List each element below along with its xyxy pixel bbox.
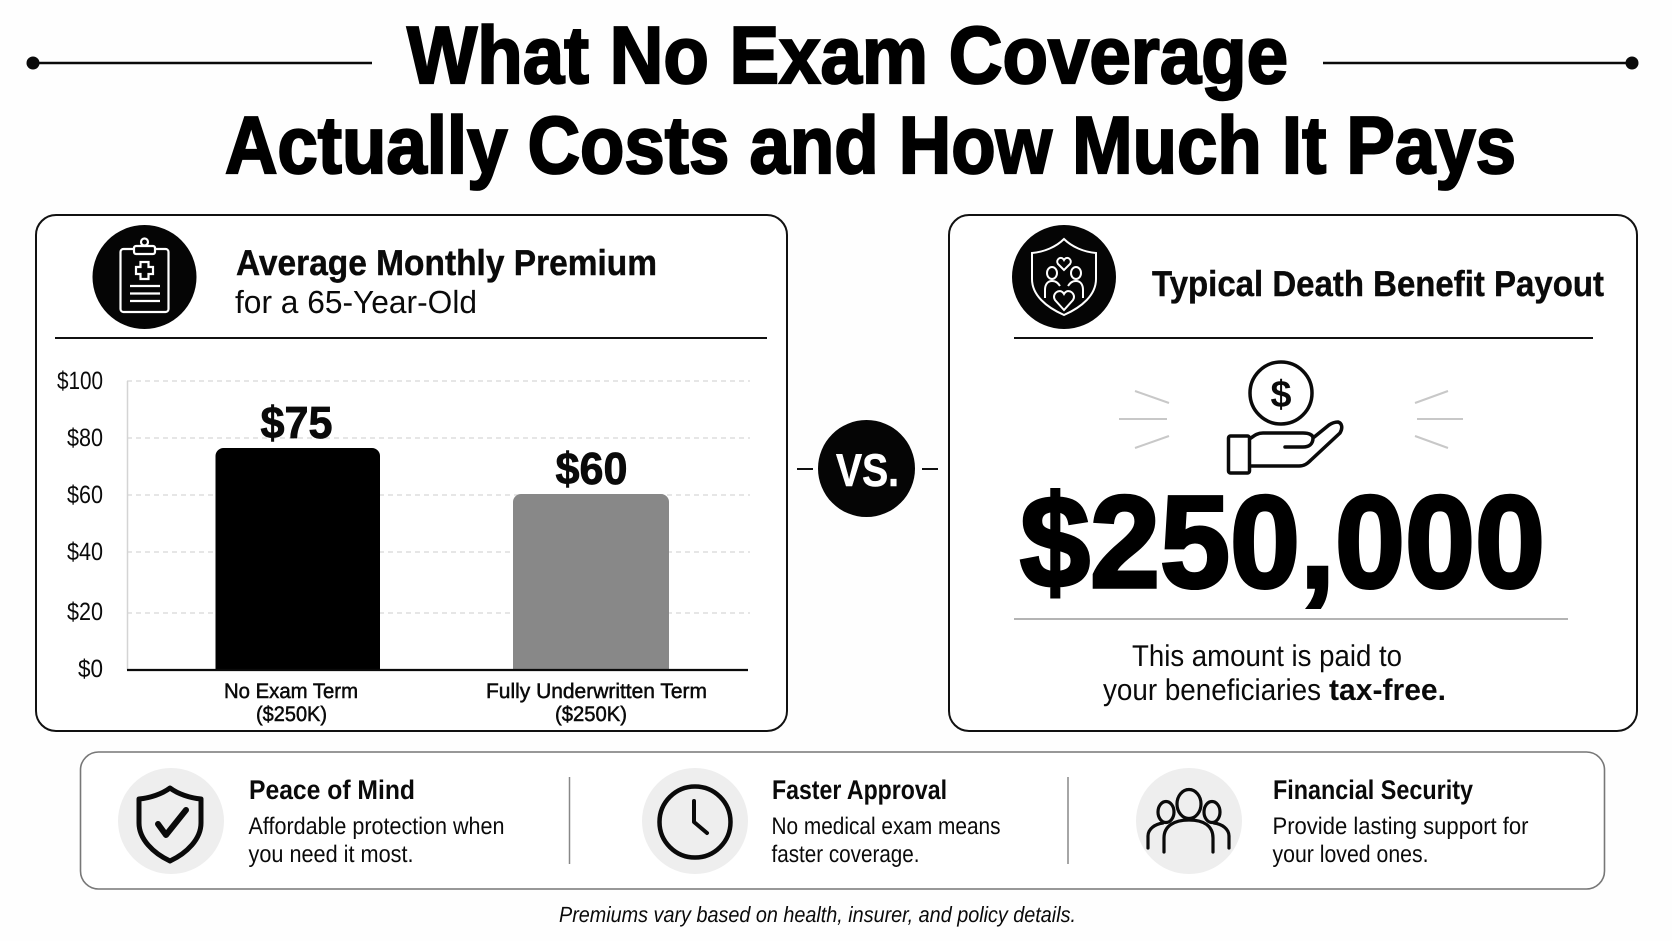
benefit text: Provide lasting support for <box>1272 813 1529 840</box>
y axis labels: $20 <box>67 598 103 626</box>
heading: Average Monthly Premium <box>236 242 657 283</box>
category label: fully underwritten: Fully Underwritten Term <box>486 680 707 703</box>
benefit heading: Faster Approval <box>772 775 947 805</box>
subheading: for a 65-Year-Old <box>235 284 477 320</box>
value: $75: $75 <box>260 397 332 448</box>
benefit text: your loved ones. <box>1272 841 1428 868</box>
category label: no exam: ($250K) <box>256 703 327 726</box>
y axis labels: $80 <box>67 424 103 452</box>
y axis labels <box>57 367 103 683</box>
category label: fully underwritten <box>486 680 707 726</box>
title rule left <box>26 56 372 70</box>
y axis labels: $0 <box>78 655 103 683</box>
bar chart <box>57 367 750 726</box>
value: $60: $60 <box>556 443 628 494</box>
panel divider <box>1014 337 1593 339</box>
panel: average monthly premium <box>36 215 787 731</box>
icon: family shield <box>1012 225 1116 329</box>
benefit text: you need it most. <box>248 841 414 868</box>
icon: clock <box>642 768 748 874</box>
benefit: faster approval <box>642 768 1000 874</box>
heading: Typical Death Benefit Payout <box>1152 263 1604 304</box>
caption: your beneficiaries <box>1103 674 1321 707</box>
icon: hand holding coin <box>1228 362 1342 473</box>
gray rule <box>1014 618 1568 620</box>
x axis <box>127 669 748 671</box>
benefit text <box>1272 813 1529 868</box>
y axis labels: $100 <box>57 367 103 395</box>
title line 2: Actually Costs and How Much It Pays <box>225 101 1516 191</box>
sparkle rays <box>1119 391 1463 448</box>
panel: benefits strip <box>80 752 1604 889</box>
icon: shield check <box>118 768 224 874</box>
benefit: financial security <box>1136 768 1529 874</box>
y axis labels: $60 <box>67 481 103 509</box>
benefit: peace of mind <box>118 768 504 874</box>
bar: no exam term <box>216 448 380 670</box>
category label: no exam <box>224 680 358 726</box>
title block <box>26 11 1638 191</box>
benefit text: faster coverage. <box>772 841 920 868</box>
icon: hand holding coin: $ <box>1270 374 1292 416</box>
benefit heading: Financial Security <box>1273 775 1473 805</box>
benefit text <box>772 813 1000 868</box>
caption: tax-free. <box>1329 674 1446 707</box>
strip frame <box>80 752 1604 889</box>
big number: $250,000 <box>1020 468 1545 615</box>
caption <box>1103 640 1446 707</box>
category label: no exam: No Exam Term <box>224 680 358 703</box>
caption: This amount is paid to <box>1132 640 1402 673</box>
benefit text: No medical exam means <box>772 813 1000 840</box>
y axis labels: $40 <box>67 538 103 566</box>
benefit text <box>248 813 504 868</box>
bar: fully underwritten term <box>513 494 669 670</box>
versus badge <box>797 420 938 517</box>
icon: medical clipboard <box>92 225 196 329</box>
category label: fully underwritten: ($250K) <box>555 703 627 726</box>
title line 1: What No Exam Coverage <box>407 11 1288 101</box>
benefit text: Affordable protection when <box>248 813 504 840</box>
panel frame <box>36 215 787 731</box>
title rule right <box>1323 56 1638 70</box>
versus badge: VS. <box>836 444 899 496</box>
panel: typical death benefit payout <box>949 215 1637 731</box>
panel divider <box>55 337 767 339</box>
icon: people <box>1136 768 1242 874</box>
panel frame <box>949 215 1637 731</box>
footnote: Premiums vary based on health, insurer, and policy details. <box>559 902 1076 927</box>
benefit heading: Peace of Mind <box>249 775 415 805</box>
